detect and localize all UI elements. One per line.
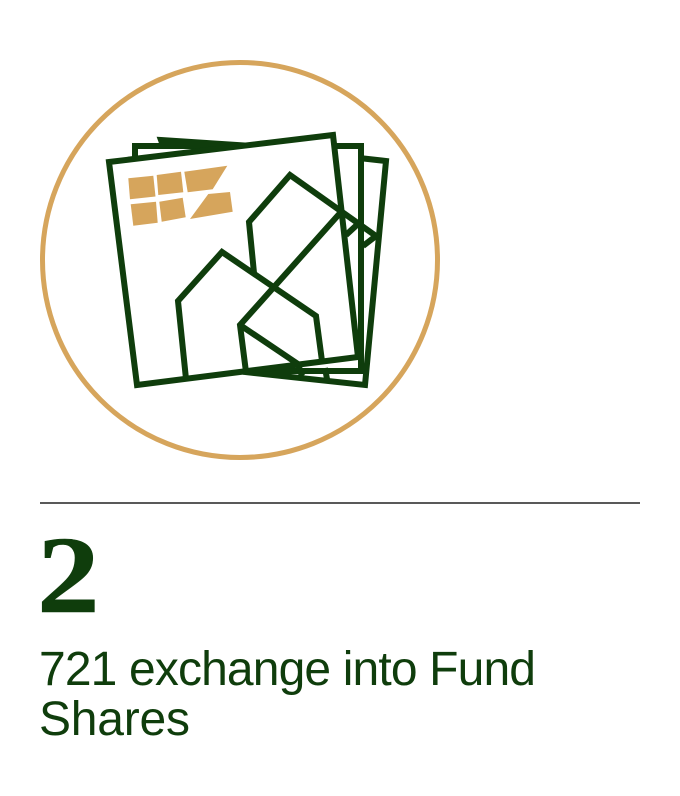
line 2: Shares (39, 693, 190, 746)
line 1: 721 exchange into Fund (39, 643, 536, 696)
front sheet fill (109, 135, 358, 385)
middle sheet (135, 146, 361, 371)
icon: stacked documents with houses (109, 135, 386, 385)
divider (40, 502, 640, 504)
house outlines (178, 252, 327, 379)
step number: 2 (37, 514, 100, 636)
step description (39, 643, 536, 746)
logo: gold HZ mark (128, 166, 233, 226)
front sheet (109, 135, 358, 385)
back sheet (161, 140, 386, 385)
icon: gold circle (42, 62, 438, 458)
